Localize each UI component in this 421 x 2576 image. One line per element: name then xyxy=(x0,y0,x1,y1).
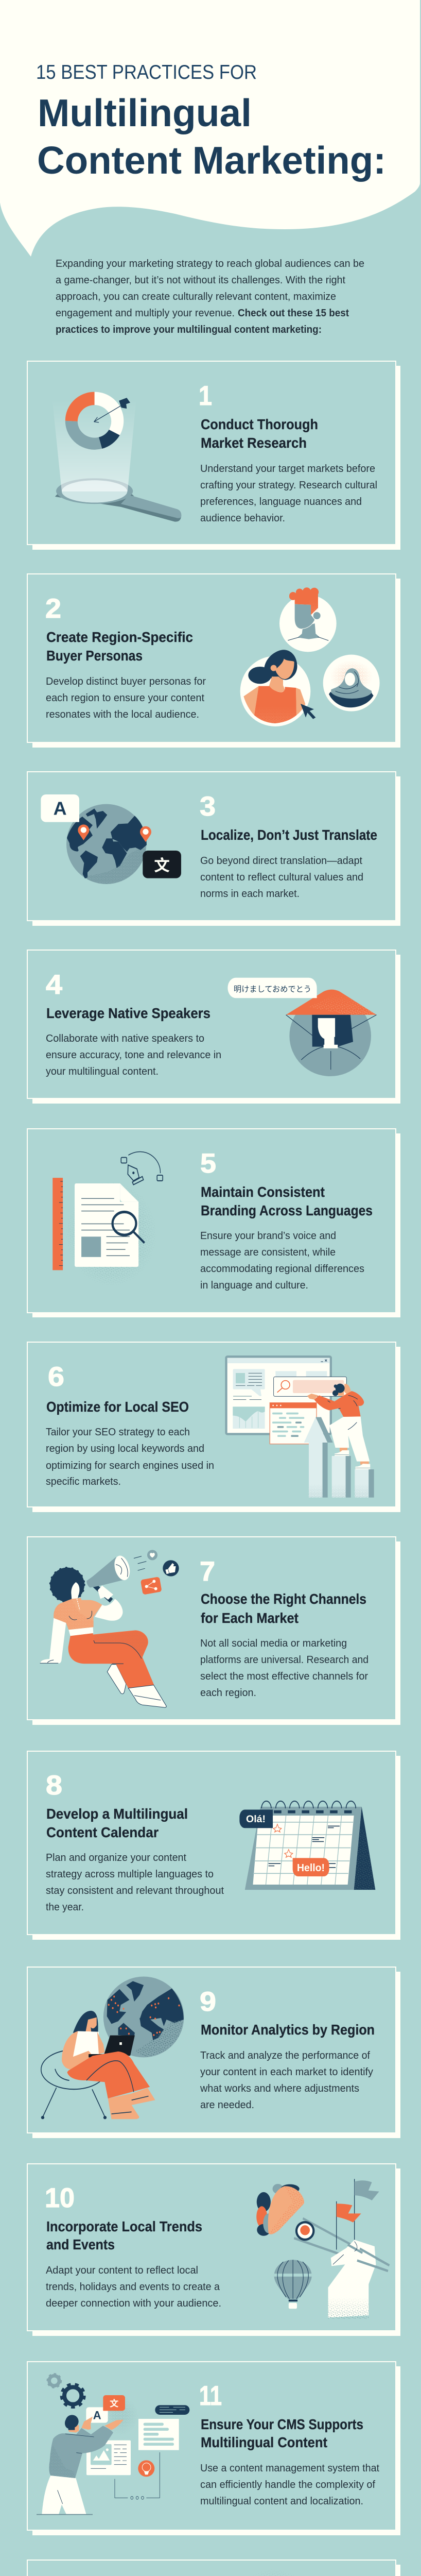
icon: native speaker in conical hat xyxy=(227,978,376,1076)
body text: message are consistent, while xyxy=(200,1247,336,1258)
body text: norms in each market. xyxy=(200,888,300,900)
body text: each region to ensure your content xyxy=(46,692,204,704)
number 5: 5 xyxy=(200,1148,216,1179)
card frame xyxy=(27,1967,400,2138)
heading: Monitor Analytics by Region xyxy=(201,2022,375,2038)
card frame xyxy=(27,361,400,550)
panel: step 4 native speakers xyxy=(27,950,400,1104)
card frame xyxy=(27,2362,400,2535)
body text: crafting your strategy. Research cultural xyxy=(200,480,377,491)
card frame xyxy=(27,772,400,926)
panel: step 10 local trends xyxy=(27,2164,400,2336)
body text xyxy=(200,1638,369,1699)
panel: step 2 buyer personas xyxy=(27,574,400,748)
heading: Leverage Native Speakers xyxy=(46,1005,210,1021)
body text xyxy=(200,2050,373,2111)
intro text: engagement and multiply your revenue. xyxy=(56,308,235,319)
speech bubble header shape xyxy=(0,0,420,257)
panel: step 6 local SEO xyxy=(27,1342,400,1512)
panel: step 11 CMS xyxy=(27,2362,400,2535)
body text: Ensure your brand’s voice and xyxy=(200,1230,336,1242)
body text: Collaborate with native speakers to xyxy=(46,1033,204,1044)
heading: Incorporate Local Trends xyxy=(46,2218,202,2234)
icon: desk calendar with greetings xyxy=(239,1801,375,1890)
body text: specific markets. xyxy=(46,1476,121,1487)
body text: trends, holidays and events to create a xyxy=(46,2281,220,2293)
icon: desk calendar with greetings: Hello! xyxy=(297,1862,325,1874)
icon: man arranging content blocks with gears xyxy=(37,2374,189,2515)
icon: magnifying glass with target donut xyxy=(52,392,181,522)
panel: step 12 visuals and multimedia xyxy=(27,2560,400,2576)
intro text xyxy=(56,258,364,335)
title xyxy=(36,61,386,182)
heading: Conduct Thorough xyxy=(201,416,318,432)
body text: optimizing for search engines used in xyxy=(46,1460,214,1471)
number 11: 11 xyxy=(199,2381,222,2411)
body text: platforms are universal. Research and xyxy=(200,1654,369,1666)
panel: step 7 right channels xyxy=(27,1537,400,1725)
heading xyxy=(46,1806,188,1840)
number 4: 4 xyxy=(46,970,63,1000)
icon: man climbing bars toward browser search window xyxy=(225,1355,374,1498)
body text: select the most effective channels for xyxy=(200,1671,368,1682)
heading: Multilingual Content xyxy=(201,2434,327,2450)
speech bubble text: 明けましておめでとう xyxy=(234,985,311,994)
heading: Ensure Your CMS Supports xyxy=(201,2416,363,2432)
number 2: 2 xyxy=(45,594,61,624)
heading: Maintain Consistent xyxy=(201,1184,325,1200)
body text: in language and culture. xyxy=(200,1280,308,1291)
icon: man arranging content blocks with gears: A xyxy=(93,2409,101,2421)
body text: Tailor your SEO strategy to each xyxy=(46,1427,190,1438)
card frame xyxy=(27,574,400,748)
number 10: 10 xyxy=(45,2183,75,2213)
body text: preferences, language nuances and xyxy=(200,496,362,507)
body text: ensure accuracy, tone and relevance in xyxy=(46,1049,221,1061)
intro text: approach, you can create culturally relevant content, maximize xyxy=(56,291,336,302)
heading xyxy=(201,1591,366,1626)
number 3: 3 xyxy=(200,791,216,822)
intro text: Expanding your marketing strategy to reach global audiences can be xyxy=(56,258,364,269)
panel: step 1 conduct market research xyxy=(27,361,400,550)
body text xyxy=(46,1852,224,1913)
body text: Develop distinct buyer personas for xyxy=(46,676,206,687)
body text xyxy=(46,676,206,720)
number 7: 7 xyxy=(200,1556,215,1587)
body text xyxy=(46,1427,214,1487)
icon: document, ruler, magnifier and pen tool xyxy=(52,1151,163,1286)
body text: region by using local keywords and xyxy=(46,1443,204,1454)
body text: Plan and organize your content xyxy=(46,1852,186,1863)
icon: man arranging content blocks with gears: 文 xyxy=(110,2396,118,2409)
card frame xyxy=(27,950,400,1104)
heading: Content Calendar xyxy=(46,1824,159,1840)
body text: resonates with the local audience. xyxy=(46,709,199,720)
body text xyxy=(46,1033,221,1077)
body text: your content in each market to identify xyxy=(200,2066,373,2078)
body text: Not all social media or marketing xyxy=(200,1638,347,1649)
body text: Use a content management system that xyxy=(200,2463,379,2474)
body text: Track and analyze the performance of xyxy=(200,2050,370,2061)
body text: are needed. xyxy=(200,2099,254,2111)
body text xyxy=(200,1230,364,1291)
body text: Go beyond direct translation—adapt xyxy=(200,855,362,867)
body text: accommodating regional differences xyxy=(200,1263,364,1275)
panel: step 9 monitor analytics xyxy=(27,1967,400,2138)
card frame xyxy=(27,1751,400,1940)
heading xyxy=(46,2218,202,2252)
card frame xyxy=(27,1342,400,1512)
icon: globe with translation bubbles: A xyxy=(54,798,67,819)
number 9: 9 xyxy=(200,1987,216,2017)
heading xyxy=(201,2416,363,2450)
heading xyxy=(46,629,193,664)
intro text: Check out these 15 best xyxy=(238,308,349,319)
body text: audience behavior. xyxy=(200,513,285,524)
heading: Market Research xyxy=(201,435,307,451)
panel: step 3 localize xyxy=(27,772,400,926)
heading: Localize, Don’t Just Translate xyxy=(201,827,377,843)
number 1: 1 xyxy=(199,381,212,411)
card frame xyxy=(27,2560,400,2576)
body text xyxy=(200,2463,379,2507)
heading: Branding Across Languages xyxy=(201,1202,373,1218)
icon: three buyer persona portraits xyxy=(240,587,380,726)
body text: deeper connection with your audience. xyxy=(46,2298,221,2309)
body text: the year. xyxy=(46,1902,84,1913)
heading xyxy=(201,416,318,451)
heading: Create Region-Specific xyxy=(46,629,193,645)
heading: for Each Market xyxy=(201,1610,299,1626)
icon: globe with translation bubbles: 文 xyxy=(154,853,170,876)
card frame xyxy=(27,2164,400,2336)
icon: desk calendar with greetings: Olá! xyxy=(246,1814,266,1825)
body text: your multilingual content. xyxy=(46,1066,159,1077)
intro text: practices to improve your multilingual content marketing: xyxy=(56,324,322,335)
body text: each region. xyxy=(200,1687,256,1699)
card frame xyxy=(27,1129,400,1317)
heading xyxy=(201,1184,373,1218)
intro text: a game-changer, but it’s not without its challenges. With the right xyxy=(56,275,345,286)
icon: globe with translation bubbles xyxy=(41,794,181,884)
icon: taco, sushi, flags and balloon xyxy=(256,2179,389,2318)
body text: multilingual content and localization. xyxy=(200,2496,363,2507)
number 6: 6 xyxy=(48,1362,64,1392)
body text xyxy=(46,2265,221,2309)
icon: video, image and audio cards xyxy=(265,2573,286,2576)
title: Multilingual xyxy=(38,91,252,134)
body text: can efficiently handle the complexity of xyxy=(200,2479,375,2490)
body text: Adapt your content to reflect local xyxy=(46,2265,198,2276)
heading: Develop a Multilingual xyxy=(46,1806,188,1822)
panel: step 5 consistent branding xyxy=(27,1129,400,1317)
body text xyxy=(200,463,377,524)
icon: woman with megaphone xyxy=(40,1550,179,1707)
heading: Buyer Personas xyxy=(46,648,143,664)
title: Content Marketing: xyxy=(37,139,386,182)
panel: step 8 content calendar xyxy=(27,1751,400,1940)
body text: strategy across multiple languages to xyxy=(46,1869,214,1880)
heading: Choose the Right Channels xyxy=(201,1591,366,1607)
body text: Understand your target markets before xyxy=(200,463,375,474)
heading: and Events xyxy=(46,2236,115,2252)
card frame xyxy=(27,1537,400,1725)
icon: woman with laptop and globe xyxy=(41,1976,184,2119)
body text xyxy=(200,855,363,900)
heading: Optimize for Local SEO xyxy=(46,1399,189,1415)
title: 15 BEST PRACTICES FOR xyxy=(36,61,257,83)
number 8: 8 xyxy=(46,1770,62,1801)
body text: content to reflect cultural values and xyxy=(200,872,363,883)
body text: stay consistent and relevant throughout xyxy=(46,1885,224,1896)
body text: what works and where adjustments xyxy=(200,2083,359,2094)
